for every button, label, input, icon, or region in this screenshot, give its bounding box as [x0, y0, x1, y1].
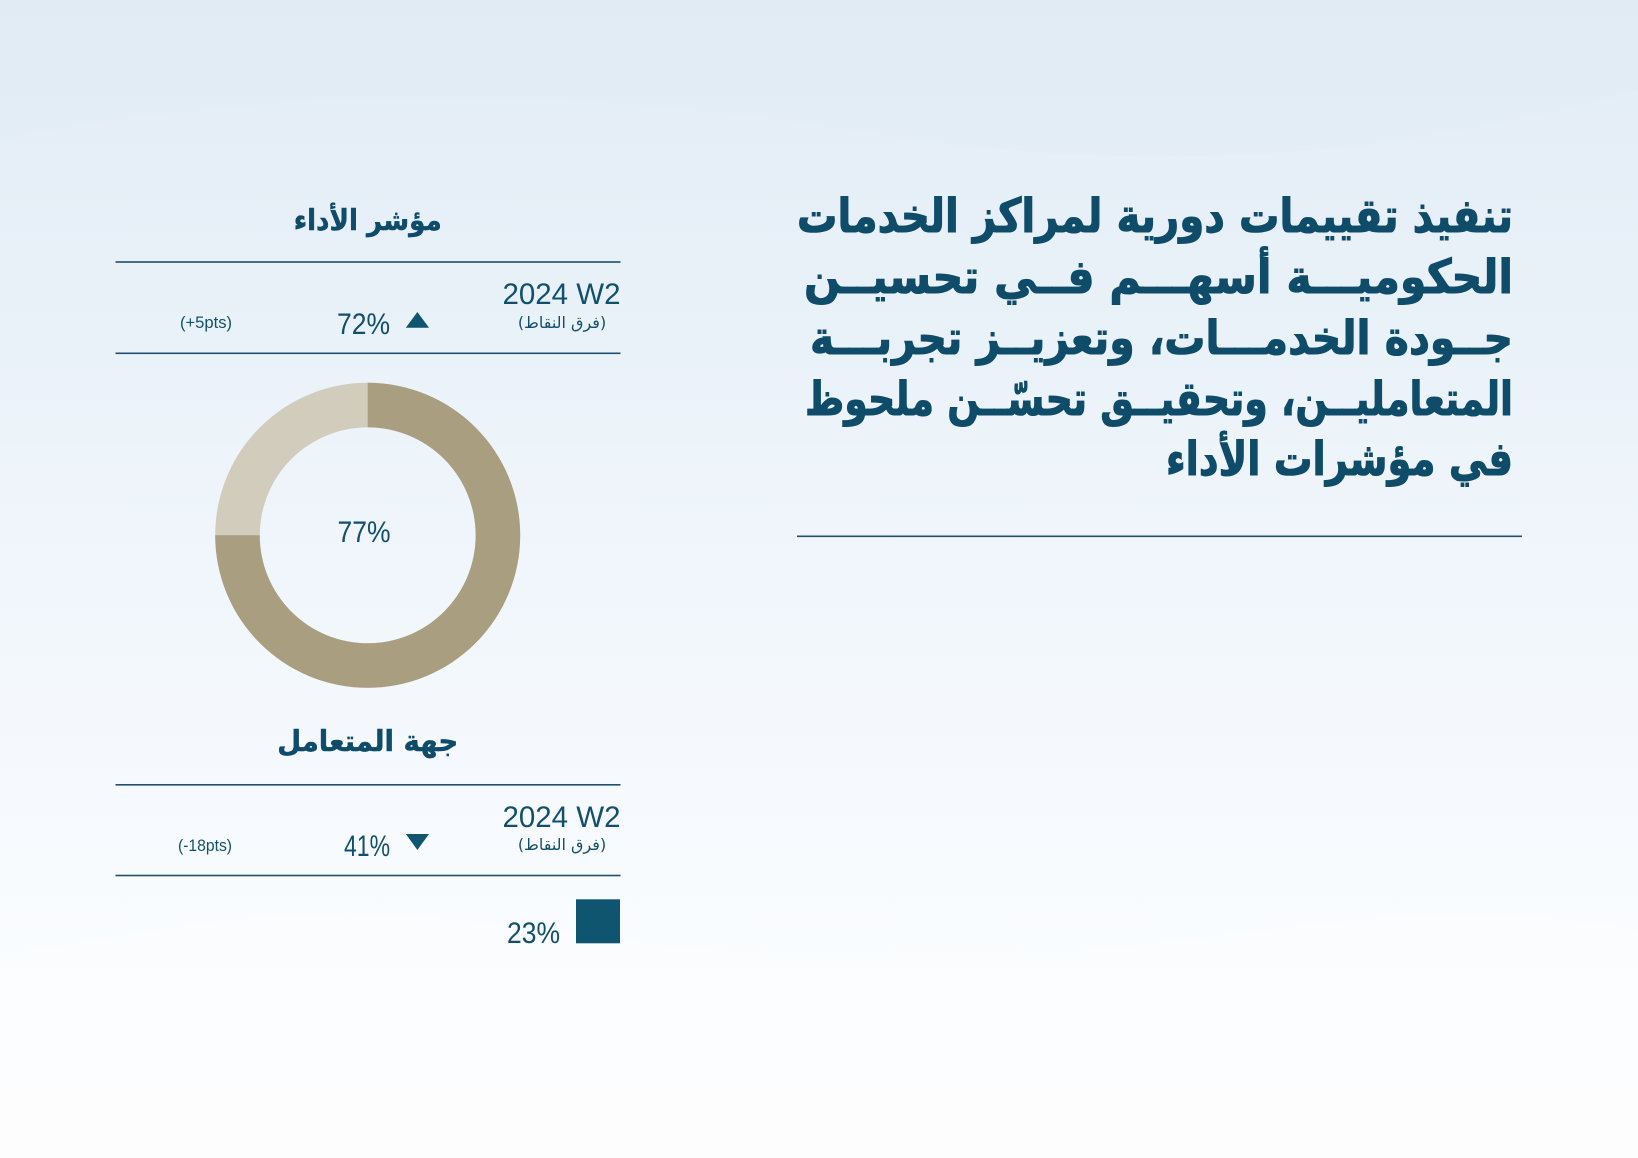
title underline	[797, 536, 1522, 537]
row: performance indicator comparison: (فرق النقاط)	[518, 313, 606, 333]
title	[797, 189, 1513, 487]
row: customer entity comparison	[116, 784, 620, 876]
row: performance indicator comparison: (+5pts)	[180, 313, 232, 332]
row: performance indicator comparison: 72%	[337, 308, 390, 341]
heading: performance indicator: مؤشر الأداء	[294, 202, 442, 237]
row: customer entity comparison: 41%	[344, 830, 390, 863]
row: customer entity comparison: 2024 W2	[502, 801, 620, 834]
row: customer entity comparison: (-18pts)	[178, 836, 232, 855]
title: تنفيذ تقييمات دورية لمراكز الخدمات	[797, 189, 1513, 244]
panel: performance indicator	[116, 202, 620, 688]
title: في مؤشرات الأداء	[1166, 430, 1513, 487]
donut chart	[215, 383, 520, 688]
donut chart: 77%	[338, 516, 390, 549]
legend: share value: 23%	[507, 917, 560, 950]
row: performance indicator comparison: 2024 W2	[502, 278, 620, 311]
row: performance indicator comparison	[116, 261, 620, 354]
title: جــودة الخدمـــات، وتعزيــز تجربـــة	[810, 311, 1513, 366]
heading: customer entity: جهة المتعامل	[277, 724, 458, 758]
panel: customer entity	[116, 724, 620, 950]
legend: share value	[507, 899, 620, 950]
row: customer entity comparison: (فرق النقاط)	[518, 835, 606, 855]
title: الحكوميـــة أسهـــم فــي تحسيــن	[804, 246, 1513, 305]
